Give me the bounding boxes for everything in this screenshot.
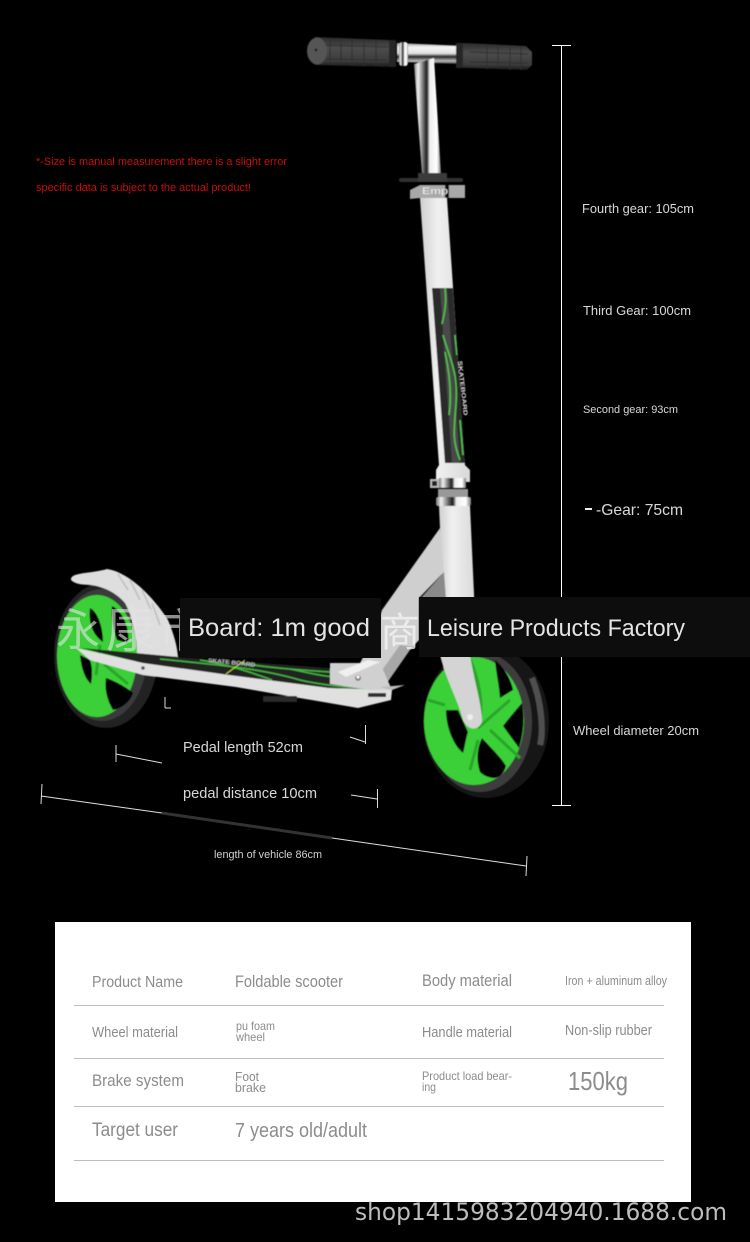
rear fender (71, 569, 178, 657)
row: wheel and handle material: Non-slip rubber (565, 1022, 652, 1039)
row: target user (92, 1120, 367, 1142)
label box: board (180, 598, 381, 658)
gear labels: Wheel diameter 20cm (573, 723, 699, 738)
spec table panel (55, 922, 691, 1202)
label box: factory (419, 597, 750, 657)
deck: SKATE BOARD (208, 657, 256, 669)
lower white tube and strut (345, 506, 477, 692)
chrome stem (414, 58, 441, 174)
row: name and body material: Iron + aluminum alloy (565, 974, 668, 988)
row: wheel and handle material: Handle material (422, 1024, 512, 1041)
row: name and body material: Body material (422, 972, 512, 990)
watermark text (58, 608, 180, 652)
height collar (430, 478, 471, 506)
pedal length dimension: Pedal length 52cm (183, 739, 303, 756)
deck (76, 648, 405, 708)
pedal distance dimension: pedal distance 10cm (183, 785, 317, 802)
gear labels (573, 201, 699, 738)
label box: board: Board: 1m good (188, 614, 370, 642)
height dimension line (552, 46, 571, 806)
row: brake and load: Foot (235, 1069, 259, 1084)
rear tire (54, 582, 158, 728)
handlebar (307, 37, 532, 70)
row: target user: 7 years old/adult (235, 1120, 367, 1142)
watermark text: 康 (106, 602, 156, 658)
front fork (440, 655, 482, 729)
vehicle length dimension: length of vehicle 86cm (214, 849, 322, 861)
watermark text: 市 (158, 605, 204, 657)
gear labels: Fourth gear: 105cm (582, 201, 694, 216)
disclaimer note: specific data is subject to the actual product! (36, 182, 251, 194)
gear labels: -Gear: 75cm (596, 502, 683, 519)
row: brake and load (92, 1066, 628, 1096)
green and black tube graphic (432, 288, 468, 463)
pedal length dimension (116, 697, 366, 763)
front tire (423, 646, 549, 798)
rear wheel hub (57, 595, 137, 717)
row: brake and load: Brake system (92, 1071, 184, 1090)
row: name and body material: Product Name (92, 974, 183, 991)
pedal distance dimension (183, 785, 378, 808)
label box: factory: Leisure Products Factory (427, 615, 685, 642)
folding clamp (399, 173, 465, 199)
row: brake and load: ing (422, 1080, 436, 1094)
watermark glyph on strut: 商 (380, 611, 420, 655)
row: brake and load: brake (235, 1080, 266, 1095)
folding clamp: Emp (422, 186, 448, 197)
gear labels: Third Gear: 100cm (583, 303, 691, 318)
axle bolt (467, 714, 473, 720)
vehicle length dimension (41, 784, 527, 876)
row: wheel and handle material (92, 1019, 652, 1044)
row: wheel and handle material: wheel (235, 1030, 265, 1044)
row: target user: Target user (92, 1120, 179, 1141)
row: name and body material (92, 972, 668, 991)
disclaimer note (36, 156, 287, 194)
gear labels: Second gear: 93cm (583, 404, 678, 416)
scooter illustration (54, 37, 549, 798)
disclaimer note: *-Size is manual measurement there is a slight error (36, 156, 287, 168)
row: wheel and handle material: pu foam (236, 1019, 275, 1033)
shop url watermark: shop1415983204940.1688.com (355, 1198, 727, 1226)
row: wheel and handle material: Wheel material (92, 1024, 178, 1041)
watermark text: 永 (56, 606, 100, 655)
green and black tube graphic: SKATEBOARD (456, 361, 468, 417)
row: name and body material: Foldable scooter (235, 973, 343, 991)
front wheel hub (424, 657, 524, 785)
row: brake and load: Product load bear- (422, 1069, 512, 1083)
table rules (74, 1006, 664, 1160)
upper white tube (420, 198, 470, 482)
row: brake and load: 150kg (568, 1066, 628, 1096)
